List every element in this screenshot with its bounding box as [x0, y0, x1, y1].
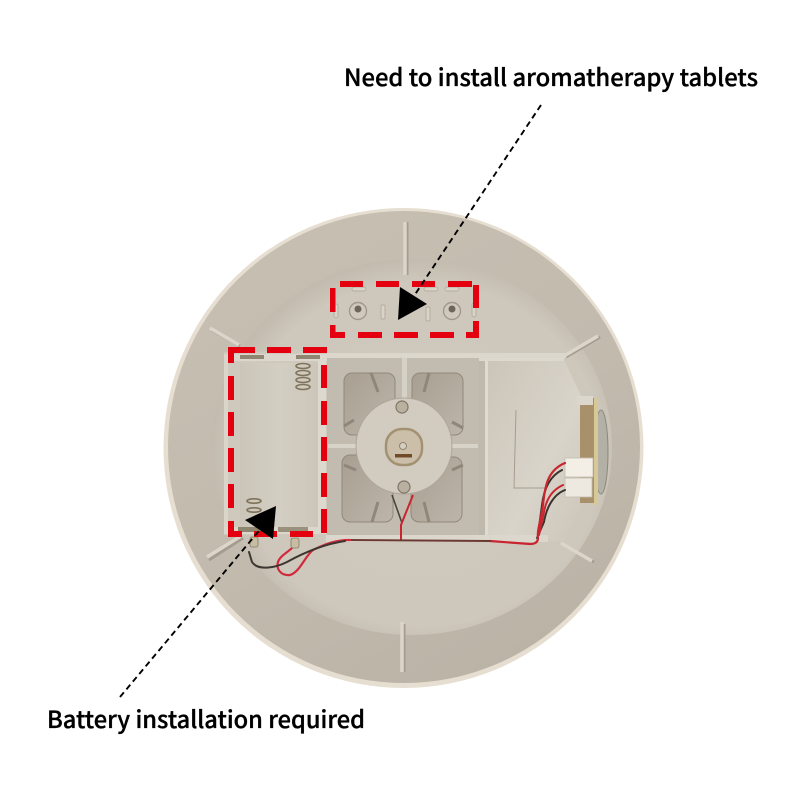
red dashed box: aromatherapy tablets [330, 281, 479, 338]
motor disc [356, 398, 452, 494]
screws [396, 401, 408, 413]
wires [249, 463, 565, 575]
floor marks [334, 287, 476, 321]
inner floor [212, 259, 612, 635]
solder lugs [250, 537, 299, 548]
motor hub [386, 429, 422, 465]
aroma tablet posts [350, 302, 460, 320]
circuit board and connectors [565, 396, 608, 505]
spring bottom [247, 499, 261, 512]
battery compartment [224, 352, 327, 535]
fan wires [392, 495, 402, 523]
label: aromatherapy tablets: Need to install aromatherapy tablets [344, 58, 758, 93]
fan bay [326, 353, 566, 542]
label: battery: Battery installation required [47, 700, 365, 735]
fan openings [344, 373, 395, 435]
rim ribs [207, 222, 600, 672]
spring top [296, 364, 310, 390]
right compartment [478, 357, 582, 541]
inner wall of rim [168, 211, 640, 683]
contacts [240, 355, 264, 359]
fan blades [344, 373, 463, 522]
arrowhead: aromatherapy tablets [398, 287, 427, 320]
outer rim [164, 208, 644, 688]
leader line: battery [120, 520, 268, 697]
red dashed box: battery [228, 347, 327, 537]
device: round aroma diffuser housing [164, 208, 644, 688]
arrowhead: battery [245, 506, 276, 539]
cross dividers [402, 358, 407, 398]
leader line: aromatherapy tablets [400, 105, 541, 317]
